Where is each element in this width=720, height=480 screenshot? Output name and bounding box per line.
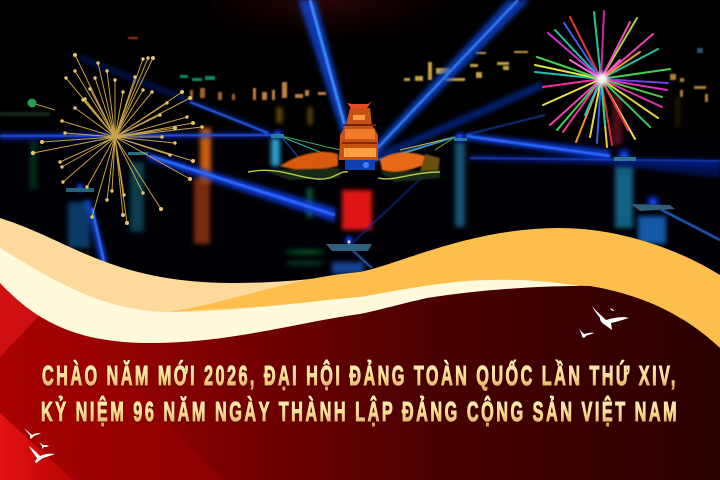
- night photo background: [0, 0, 720, 300]
- rainbow firework: [535, 11, 670, 147]
- heading: title line 1: CHÀO NĂM MỚI 2026, ĐẠI HỘI ĐẢNG TOÀN QUỐC LẦN THỨ XIV,: [42, 359, 675, 391]
- gold firework: [28, 53, 204, 225]
- boats with lights: [66, 127, 675, 251]
- red background with diagonal facets: [0, 283, 720, 480]
- gold wave band: [170, 228, 720, 348]
- light orange wave band: [0, 218, 420, 330]
- water reflections: [30, 95, 679, 274]
- icon: white doves lower left: [24, 428, 55, 463]
- cream wave band: [0, 248, 580, 343]
- icon: white doves upper right: [577, 306, 629, 338]
- Turtle Tower island with lights: [248, 101, 440, 182]
- heading: title line 2: KỶ NIỆM 96 NĂM NGÀY THÀNH LẬP ĐẢNG CỘNG SẢN VIỆT NAM: [41, 395, 677, 427]
- city lights along the shore: [0, 37, 708, 116]
- laser beams: [0, 0, 720, 268]
